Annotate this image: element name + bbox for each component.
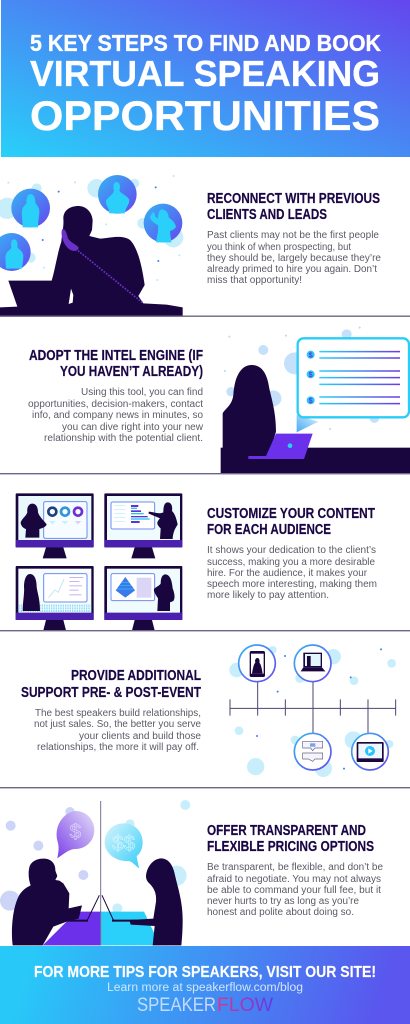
silhouette: man at laptop [0,206,183,316]
body text: success, making you a more desirable [207,557,375,568]
speech bubble with list: $ [309,352,313,359]
title line 3: OPPORTUNITIES [30,92,380,139]
heading [21,668,201,701]
panel: customize your content [16,493,377,630]
body text: speech more interesting, making them [207,579,377,590]
body text [28,387,204,444]
body text: they should be, largely because they’re [207,253,381,264]
gap under arm [69,289,73,304]
body text: The best speakers build relationships, [35,708,201,719]
call to action: FOR MORE TIPS FOR SPEAKERS, VISIT OUR SITE! [34,964,376,981]
body text: afraid to negotiate. You may not always [207,874,381,885]
body text: your clients and build those [79,731,201,742]
body text: more likely to pay attention. [207,590,329,601]
body text: It shows your dedication to the client’s [207,545,376,556]
blog link text: Learn more at speakerflow.com/blog [107,982,303,994]
panel: adopt the intel engine [28,327,410,473]
speech bubble tail [297,415,318,432]
silhouette: woman [129,858,183,945]
heading: ADOPT THE INTEL ENGINE (IF [29,348,203,364]
heading [29,348,203,380]
icon: client circle 1 [11,189,50,227]
phone cord [78,251,143,303]
table [43,912,160,945]
heading: FLEXIBLE PRICING OPTIONS [207,839,374,855]
header banner [1,0,410,157]
icon: client circle 2 [98,175,137,214]
panel: transparent pricing [0,800,383,945]
icon: phone handset [62,229,79,251]
silhouette: man [12,859,82,945]
desk [221,448,410,473]
heading [207,191,380,223]
monitor 1: donut charts [16,493,94,558]
body text: hire. For the audience, it makes your [207,568,368,579]
body text [207,545,377,601]
title line 2: VIRTUAL SPEAKING [30,53,380,94]
body text: already primed to hire you again. Don’t [207,264,377,275]
heading: YOU HAVEN’T ALREADY) [60,364,203,380]
heading: PROVIDE ADDITIONAL [71,668,201,684]
monitor 3: line chart [16,566,94,630]
monitor 4: pyramid [104,566,182,630]
body text: Be transparent, be flexible, and don’t be [207,862,383,873]
heading: CUSTOMIZE YOUR CONTENT [207,506,375,522]
body text: not just sales. So, the better you serve [34,719,201,730]
body text: you think of when prospecting, but [207,242,351,253]
heading: OFFER TRANSPARENT AND [207,823,366,839]
title line 1: 5 KEY STEPS TO FIND AND BOOK [30,30,381,56]
timeline [230,682,396,733]
heading [207,506,375,538]
body text: opportunities, decision-makers, contact [28,399,203,410]
speech bubble with list [298,338,409,417]
icon: client circle 4 [0,233,31,271]
speech bubble: dollars: $$ [112,832,136,855]
body text [207,230,381,286]
icon: laptop [294,645,331,682]
body text [207,862,383,918]
panel: additional support [21,645,396,777]
logo: SpeakerFlow: FLOW [217,994,274,1016]
body text [34,708,201,753]
logo: SpeakerFlow [137,994,274,1016]
illustration: negotiation across a table [0,800,190,945]
icon: client circle 3 [144,204,182,242]
icon: chat messages [294,733,331,770]
illustration: man on phone with client circles [0,175,183,316]
speech bubble: dollar [57,811,94,858]
footer banner [0,946,410,1024]
illustration: timeline with icons [229,645,396,777]
heading: FOR EACH AUDIENCE [207,522,331,538]
body text: Past clients may not be the first people [207,230,379,241]
body text: you can dive right into your new [62,422,204,433]
heading: SUPPORT PRE- & POST-EVENT [21,685,201,701]
body text: relationship with the potential client. [44,433,203,444]
monitor 2: bar chart [104,493,182,558]
illustration: woman at laptop with data bubble [221,327,410,473]
illustration: four presentation monitors [16,493,182,630]
speech bubble with list: $ [309,372,313,379]
heading: CLIENTS AND LEADS [207,207,327,223]
heading [207,823,374,855]
icon: video player [352,733,388,770]
silhouette: woman [223,365,276,452]
body text: info, and company news in minutes, so [32,410,203,421]
icon: laptop [248,434,313,459]
body text: Using this tool, you can find [81,387,203,398]
speech bubble: dollars [105,823,143,869]
body text: honest and polite about doing so. [207,907,354,918]
body text: be able to command your full fee, but it [207,885,381,896]
panel: reconnect with clients [0,175,381,316]
body text: relationships, the more it will pay off. [37,742,199,753]
logo: SpeakerFlow: SPEAKER [137,994,216,1016]
speech bubble: dollar: $ [70,820,82,843]
body text: never hurts to try as long as you’re [207,896,359,907]
body text: miss that opportunity! [207,275,302,286]
laptops [63,895,137,921]
speech bubble with list: $ [309,398,313,405]
icon: phone video [239,645,275,682]
